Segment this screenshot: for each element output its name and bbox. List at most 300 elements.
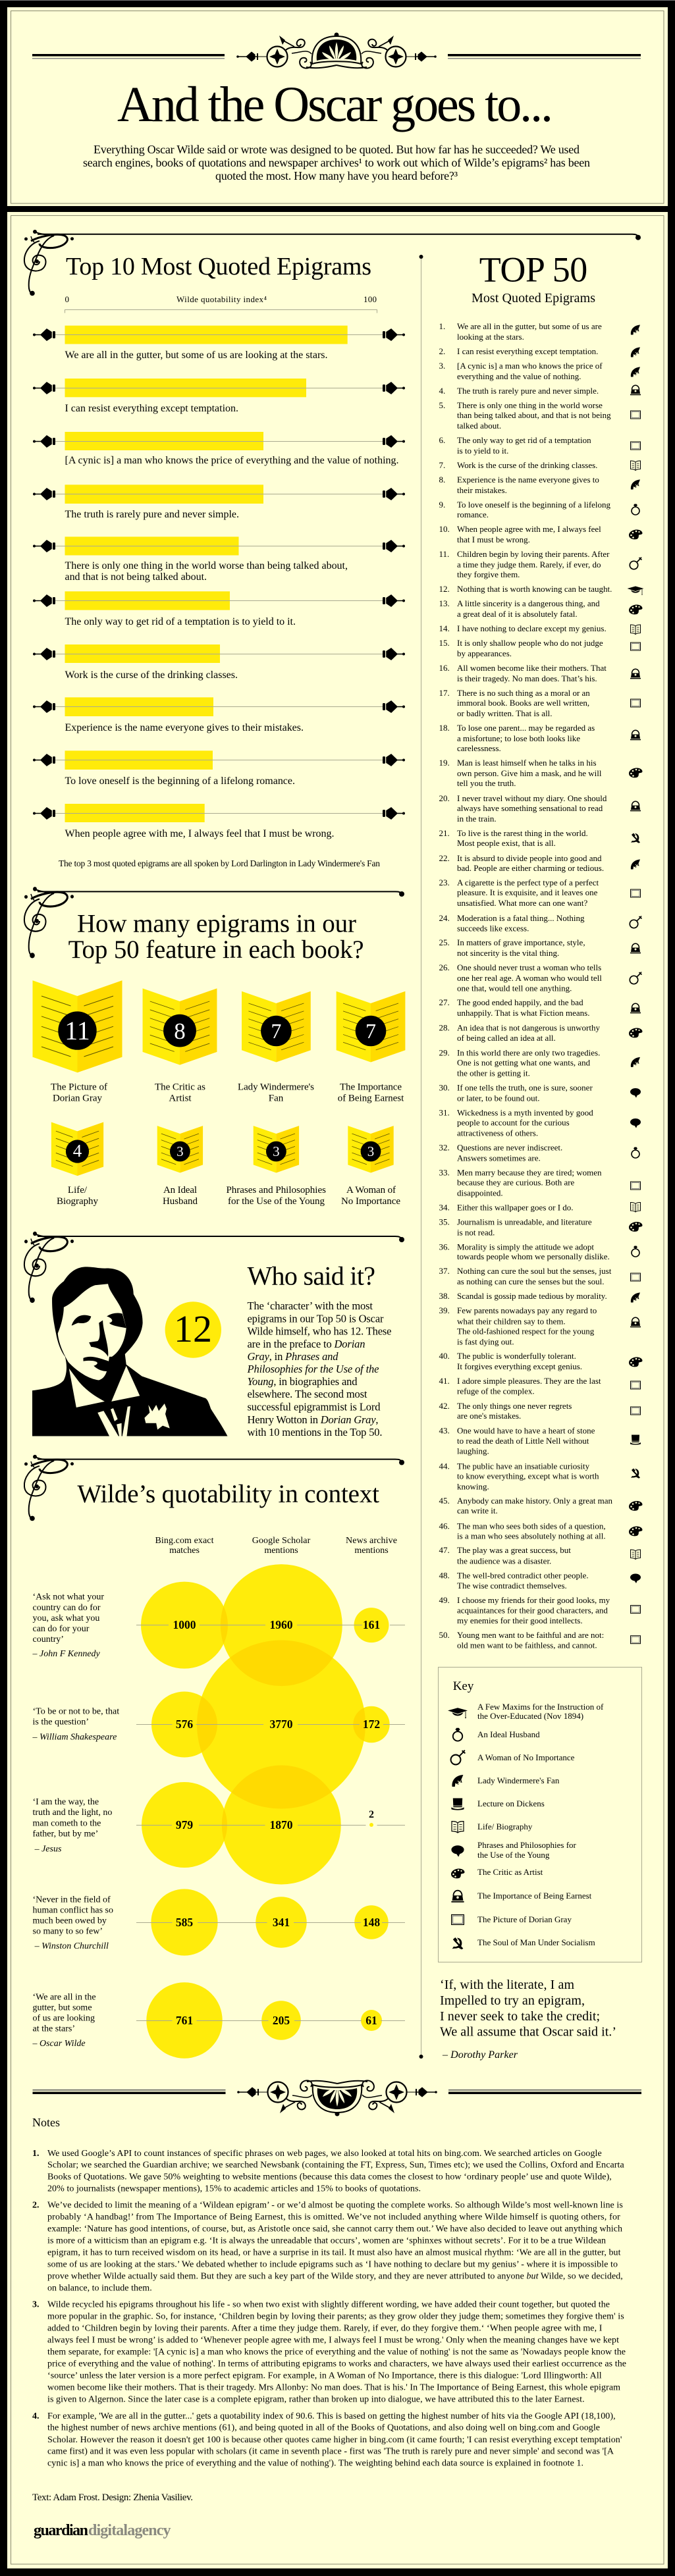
item 6 [439,435,640,456]
item 9: romance. [457,510,489,519]
item 16: 16. [439,663,450,673]
item 46: The man who sees both sides of a question, [457,1521,606,1531]
book: Life/Biography: Biography [57,1196,99,1207]
item 22: 22. [439,853,450,863]
item 20: I never travel without my diary. One should [457,793,607,803]
item 11: 11. [439,549,449,559]
key row: phrases [451,1840,577,1860]
item 22 [439,853,640,873]
item 28: of being called an idea at all. [457,1033,556,1043]
item 2: 2. [439,346,445,356]
book: Phrases and Philosophies: Phrases and Philosophies [226,1185,326,1196]
intro text: quoted the most. How many have you heard before?³ [215,169,458,182]
item 32: Questions are never indiscreet. [457,1143,562,1153]
column headers: mentions [264,1546,298,1556]
quote: Dorothy Parker: I never seek to take the credit; [440,2009,600,2024]
key row: maxims: the Over-Educated (Nov 1894) [477,1711,583,1721]
item 19: own person. Give him a mask, and he will [457,768,602,778]
row: Kennedy: 161 [363,1618,380,1631]
item 8: Experience is the name everyone gives to [457,475,599,485]
text block: who said it: successful epigrammist is Lord [248,1401,381,1413]
text block: who said it: are in the preface to Dorian [248,1338,365,1350]
item 44: knowing. [457,1481,489,1492]
item 37 [439,1266,640,1286]
row: Shakespeare: 172 [363,1718,380,1731]
intro text: search engines, books of quotations and newspaper archives¹ to work out which of Wilde’s epigrams² has been [83,156,590,169]
item 4: The truth is rarely pure and never simple. [457,386,599,396]
book: Phrases and Philosophies: 3 [273,1143,280,1159]
note 4: cynic is] a man who knows the price of everything and the value of nothing'). The weighting behind each data source is explained in footnote 1. [47,2459,583,2469]
item 33: Men marry because they are tired; women [457,1168,602,1177]
note 4: Scholar. However the reason it doesn't get 100 is because other quotes came higher in bing.com (it came fourth; 'I can resist everything except temptation' [47,2435,622,2445]
heading: books: Top 50 feature in each book? [68,935,364,964]
book: Lady Windermere's Fan [238,991,314,1103]
bar row 8 [33,697,405,733]
bar row 10: When people agree with me, I always feel that I must be wrong. [65,828,335,839]
note 1: 1. [32,2149,40,2159]
row: Churchill [33,1895,405,1951]
quote: Dorothy Parker: Impelled to try an epigram, [440,1993,585,2008]
book: A Woman of No Importance: A Woman of [346,1185,396,1196]
item 34: Either this wallpaper goes or I do. [457,1203,574,1213]
note 4: For example, 'We are all in the gutter...' gets a quotability index of 90.6. This is based on getting the highest number of hits via the Google API (18,100), [47,2411,616,2421]
item 44: to know everything, except what is worth [457,1471,599,1481]
bubbles [141,1564,390,2059]
item 42: 42. [439,1401,450,1411]
item 32: 32. [439,1143,450,1153]
row: Jesus: man cometh to the [33,1818,101,1829]
bar row 10 [33,804,405,839]
item 31: people to account for the curious [457,1118,570,1128]
row: Shakespeare: 3770 [270,1718,293,1731]
note 1: Scholar; we searched the Guardian archive; we searched Newsbank (containing the FT, Express, Sun, Times etc); we used the Collins, Oxford and Encarta [47,2161,624,2170]
key row: maxims [448,1702,604,1721]
book: Lady Windermere's Fan: Fan [269,1093,284,1103]
item 26: one that, would tell one anything. [457,984,572,993]
item 6: The only way to get rid of a temptation [457,435,591,445]
note 2: probably ‘A handbag!’ from The Importance of Being Earnest, this is omitted. We’ve not included anything where Wilde himself is quoting others, for [47,2212,620,2222]
column divider: top 50 [419,255,423,2059]
item 33: because they are curious. Both are [457,1178,575,1188]
key row: critic: The Critic as Artist [477,1867,543,1877]
chart: top 10 bars [33,294,405,839]
heading: notes: Notes [32,2116,60,2129]
item 16 [439,663,641,683]
note 3: always feel I must be wrong’ is added to ‘Whenever people agree with me, I always feel I must be wrong.' Only when the meaning changes have we kept [47,2336,619,2345]
column headers: mentions [354,1546,389,1556]
bar row 3 [33,432,405,466]
item 44: The public have an insatiable curiosity [457,1461,590,1471]
note 2: example: ‘Nature has good intentions, of course, but, as Aristotle once said, she cannot carry them out.’ We have also decided to leave out anything which [47,2224,622,2234]
row: Wilde: gutter, but some [33,2003,92,2013]
row: Kennedy: 1960 [270,1618,293,1631]
item 48: 48. [439,1571,450,1580]
item 44 [439,1461,640,1492]
text block: who said it: with 10 mentions in the Top 50. [248,1426,382,1438]
item 19 [439,758,643,788]
item 37: 37. [439,1266,450,1276]
item 11: they forgive them. [457,569,520,579]
bar row 5: There is only one thing in the world worse than being talked about, [65,560,348,571]
item 15 [439,638,640,658]
quote: Dorothy Parker [440,1978,616,2061]
item 27 [439,997,641,1018]
item 35: Journalism is unreadable, and literature [457,1217,592,1227]
item 38 [439,1291,640,1302]
item 30: or later, to be found out. [457,1093,539,1103]
item 17: 17. [439,688,450,698]
row: Churchill: 341 [273,1916,290,1929]
item 39 [439,1305,641,1347]
item 39: what their children say to them. [457,1316,566,1326]
row: Kennedy: can do for your [33,1624,90,1634]
bar row 5: and that is not being talked about. [65,571,207,583]
callout: number 12: 12 [174,1307,212,1350]
row: Churchill: 585 [176,1916,193,1929]
item 34 [439,1202,640,1213]
subheading: most quoted: Most Quoted Epigrams [472,291,595,305]
item 21: Most people exist, that is all. [457,838,556,848]
row: Jesus [33,1797,405,1854]
row: Churchill: 148 [363,1916,380,1929]
item 29: 29. [439,1048,450,1057]
panel: key [439,1667,641,1962]
text block: who said it: Henry Wotton in Dorian Gray, [248,1413,378,1426]
item 47: the audience was a disaster. [457,1556,551,1565]
item 40: The public is wonderfully tolerant. [457,1351,576,1361]
item 36: towards people whom we personally dislike. [457,1251,610,1261]
item 45: 45. [439,1496,450,1506]
item 38: Scandal is gossip made tedious by morality. [457,1291,607,1301]
item 24 [439,913,641,933]
item 7 [439,460,640,470]
item 17: or badly written. That is all. [457,708,553,718]
item 35: is not read. [457,1228,495,1238]
item 33: disappointed. [457,1188,503,1198]
text block: who said it: elsewhere. The second most [248,1388,367,1400]
book: A Woman of No Importance [341,1126,400,1207]
item 4 [439,385,641,396]
bar row 2: I can resist everything except temptation. [65,403,238,414]
item 30 [439,1082,641,1103]
key row: dickens: Lecture on Dickens [477,1799,545,1808]
heading: quotability: Wilde’s quotability in context [77,1480,379,1508]
notes [32,2149,626,2469]
bar row 1: We are all in the gutter, but some of us are looking at the stars. [65,350,328,361]
item 20: always have something sensational to read [457,803,603,813]
key row: dickens [451,1799,545,1810]
note 2: prove whether Wilde actually said them. But they are such a key part of the Wilde story, and they are never attributed to anyone but Wilde, so we decided, [47,2271,623,2281]
item 18: To lose one parent... may be regarded as [457,723,595,733]
quote: Dorothy Parker: ‘If, with the literate, I am [440,1978,574,1992]
book: Dorian Gray [33,980,122,1103]
chart: epigrams per book [33,980,405,1207]
item 23 [439,878,640,908]
bar row 7 [33,644,405,681]
row: Churchill: – Winston Churchill [34,1941,109,1951]
bar row 7: Work is the curse of the drinking classes. [65,670,238,681]
item 31 [439,1107,641,1138]
row: Kennedy: ‘Ask not what your [33,1592,104,1602]
item 47 [439,1545,640,1565]
row: Kennedy [32,1592,405,1659]
item 32: Answers sometimes are. [457,1153,541,1163]
item 26: 26. [439,962,450,972]
item 15: 15. [439,638,450,648]
book: A Woman of No Importance: 3 [367,1143,374,1159]
note 2: is more of a witticism than an epigram e.g. ‘It is always the unreadable that occurs’, women are ‘sphinxes without secrets’. For it to be a true Wildean [47,2236,606,2246]
item 4: 4. [439,386,445,396]
note 3: more popular in the graphic. So, for instance, ‘Children begin by loving their parents; as they grow older they judge them; sometimes they forgive them' is [47,2312,624,2322]
book: Lady Windermere's Fan: 7 [271,1019,281,1043]
item 41: refuge of the complex. [457,1386,535,1396]
item 10 [439,524,643,544]
bar row 4: The truth is rarely pure and never simple. [65,509,239,520]
book: Dorian Gray: 11 [65,1016,90,1045]
key row: woman of no importance: A Woman of No Importance [477,1752,575,1762]
book: Phrases and Philosophies: for the Use of the Young [228,1196,325,1207]
row: Wilde: of us are looking [33,2014,95,2024]
item 22: bad. People are either charming or tedious. [457,863,604,873]
item 15: by appearances. [457,648,512,658]
heading: TOP 50: TOP 50 [479,250,587,289]
row: Jesus: 979 [176,1818,193,1831]
note 3: is given to Algernon. Since the later case is a complete epigram, rather than broken up into dialogue, we have attributed this to the later Earnest. [47,2395,585,2405]
key row: biography [452,1822,533,1833]
item 18 [439,723,641,753]
item 30: If one tells the truth, one is sure, sooner [457,1082,593,1093]
item 17: immoral book. Books are well written, [457,698,589,708]
item 32 [439,1143,639,1163]
item 36: 36. [439,1242,450,1252]
row: Jesus: father, but by me’ [33,1829,98,1839]
item 22: It is absurd to divide people into good and [457,853,602,863]
item 40: 40. [439,1351,450,1361]
note 2: epigram, it has to turn received wisdom on its head, or have a surprise in its tail. It must also have an almost musical rhythm: ‘We are all in the gutter, but [47,2247,621,2258]
item 46 [439,1521,643,1540]
key row: socialism: The Soul of Man Under Socialism [477,1937,595,1947]
text block: who said it: Young, in biographies and [248,1375,358,1388]
note 4 [32,2411,622,2469]
note 2: some of us are looking at the stars.’ We debated whether to include epigrams such as ‘I have nothing to declare but my genius’ - where it is impossible to [47,2260,618,2270]
item 7: 7. [439,460,445,470]
key row: woman of no importance [451,1750,575,1764]
item 28 [439,1023,643,1043]
book: Importance of Being Earnest: of Being Earnest [338,1093,404,1103]
key row: windermere [452,1775,560,1787]
item 49: acquaintances for their good characters, and [457,1605,608,1615]
item 35 [439,1217,643,1238]
note 3: ‘source’ unless the later version is a more perfect epigram. For example, in A Woman of No Importance, there is this dialogue: 'Lord Illingworth: All [47,2371,602,2381]
row: Shakespeare: is the question’ [33,1717,89,1727]
item 49: I choose my friends for their good looks, my [457,1595,610,1605]
item 34: 34. [439,1203,450,1213]
heading: books: How many epigrams in our [77,910,356,937]
book: Critic as Artist [143,988,217,1103]
item 27: The good ended happily, and the bad [457,997,583,1007]
intro text [83,143,590,182]
item 15: It is only shallow people who do not judge [457,638,603,648]
bar row 8: Experience is the name everyone gives to their mistakes. [65,722,304,733]
row: Wilde: 61 [365,2014,377,2027]
note 4: came first) and it was even less popular with scholars (it came in seventh place - first was 'The truth is rarely pure and never simple' and second was '[A [47,2446,614,2457]
item 39: is fast dying out. [457,1336,514,1347]
key row: earnest: The Importance of Being Earnest [477,1891,592,1901]
note 3: Wilde recycled his epigrams throughout his life - so when two exist with slightly different wording, we have added their count together, but quoted the [47,2300,610,2309]
item 42: The only things one never regrets [457,1401,572,1411]
item 24: 24. [439,913,450,923]
illustration: Oscar Wilde portrait [32,1267,227,1436]
item 9: To love oneself is the beginning of a lifelong [457,500,611,510]
item 41: I adore simple pleasures. They are the last [457,1376,601,1386]
item 6: 6. [439,435,445,445]
row: Churchill: ‘Never in the field of [33,1895,111,1905]
bar row 9 [33,750,405,787]
row: Shakespeare [32,1706,405,1742]
item 45: can write it. [457,1506,498,1515]
book: Life/Biography: 4 [73,1141,82,1161]
item 23: pleasure. It is exquisite, and it leaves one [457,887,598,897]
logo: guardian digital agency: digitalagency [88,2522,171,2539]
item 10: that I must be wrong. [457,535,530,544]
key row: maxims: A Few Maxims for the Instruction of [477,1702,604,1712]
column headers: News archive [346,1536,397,1546]
book: An Ideal Husband: Husband [163,1196,198,1207]
chart: quotability bubbles [32,1536,405,2059]
note 2: We’ve decided to limit the meaning of a ‘Wildean epigram’ - or we’d almost be quoting the complete works. So although Wilde’s most well-known line is [47,2201,623,2211]
row: Wilde: 761 [176,2014,193,2027]
book: Phrases and Philosophies [226,1126,326,1207]
text block: who said it [246,1300,391,1438]
item 29: One is not getting what one wants, and [457,1058,591,1068]
item 21 [439,828,640,848]
item 40: It forgives everything except genius. [457,1361,582,1371]
item 10: 10. [439,524,450,534]
item 1: 1. [439,321,445,331]
heading: books [68,910,364,964]
note 3: 3. [32,2300,40,2309]
row: Jesus: – Jesus [34,1845,62,1854]
item 44: 44. [439,1461,450,1471]
item 24: Moderation is a fatal thing... Nothing [457,913,585,923]
key row: windermere: Lady Windermere's Fan [477,1775,560,1785]
note 1: Books of Quotations. We gave 50% weighting to website mentions (because this data comes the closest to how ‘ordinary people’ use and quote Wilde), [47,2172,612,2182]
item 23: unsatisfied. What more can one want? [457,898,588,908]
item 46: is a man who sees absolutely nothing at all. [457,1531,606,1540]
item 1: looking at the stars. [457,332,524,342]
key row: critic [451,1867,543,1878]
item 43: 43. [439,1426,450,1435]
item 19: Man is least himself when he talks in his [457,758,597,768]
note 2 [32,2201,623,2294]
book: Dorian Gray: The Picture of [51,1082,107,1093]
row: Kennedy: country can do for [33,1603,101,1613]
bar row 6: The only way to get rid of a temptation is to yield to it. [65,616,296,627]
book: Critic as Artist: Artist [169,1093,192,1103]
item 36 [439,1242,639,1261]
item 26 [439,962,641,993]
item 10: When people agree with me, I always feel [457,524,601,534]
item 6: is to yield to it. [457,446,508,456]
item 13: A little sincerity is a dangerous thing, and [457,598,600,608]
book: Lady Windermere's Fan: Lady Windermere's [238,1082,314,1093]
item 19: 19. [439,758,450,768]
row: Jesus: truth and the light, no [33,1808,112,1818]
item 30: 30. [439,1082,450,1093]
column headers: Bing.com exact [155,1536,214,1546]
credits: Text: Adam Frost. Design: Zhenia Vasiliev. [32,2492,193,2503]
item 27: 27. [439,997,450,1007]
item 48 [439,1571,641,1590]
axis: Wilde quotability index⁴ [176,294,267,304]
item 3: 3. [439,361,445,371]
item 47: 47. [439,1545,450,1555]
item 8: 8. [439,475,445,485]
item 33 [439,1168,640,1198]
note 3: women become like their mothers. That is their tragedy. Mrs Allonby: No man does. That is his.' In The Importance of Being Earnest, this whole epigram [47,2382,620,2392]
column headers: matches [169,1546,200,1556]
item 45: Anybody can make history. Only a great man [457,1496,612,1506]
key row: biography: Life/ Biography [477,1822,533,1831]
title: And the Oscar goes to... [117,77,553,132]
item 29: the other is getting it. [457,1068,530,1078]
item 29 [439,1048,640,1078]
key row: ideal husband [453,1728,540,1741]
item 11 [439,549,641,579]
item 23: A cigarette is the perfect type of a perfect [457,878,599,887]
note 2: 2. [32,2201,40,2211]
item 48: The well-bred contradict other people. [457,1571,589,1580]
text block: who said it: Philosophies for the Use of the [246,1363,379,1375]
item 5: than being talked about, and that is not being [457,410,611,420]
footer ornament [33,2080,641,2116]
item 43: laughing. [457,1446,489,1456]
note 3: them separate, for example: '[A cynic is] a man who knows the price of everything and the value of nothing' is not the same as 'Nowadays people know the [47,2348,626,2357]
list: top 50 epigrams [439,321,644,1650]
item 50 [439,1630,640,1650]
note 4: 4. [32,2411,40,2421]
key row: dorian gray: The Picture of Dorian Gray [477,1914,572,1924]
bar row 9: To love oneself is the beginning of a lifelong romance. [65,775,295,787]
bar row 3: [A cynic is] a man who knows the price of everything and the value of nothing. [65,455,399,466]
item 42 [439,1401,640,1421]
item 20: in the train. [457,814,497,824]
item 41 [439,1376,640,1396]
quote: Dorothy Parker: We all assume that Oscar said it.’ [440,2025,616,2039]
item 2: I can resist everything except temptation. [457,346,598,356]
item 16: is their tragedy. No man does. That’s his. [457,673,597,683]
book: An Ideal Husband: An Ideal [163,1185,197,1196]
item 49: my enemies for their good intellects. [457,1616,583,1625]
item 37: as nothing can cure the senses but the soul. [457,1276,604,1286]
book: Life/Biography: Life/ [68,1185,88,1196]
section flourish: books [24,887,404,958]
book: Life/Biography [51,1122,103,1207]
note 3: price of everything and the value of nothing'. In terms of attributing epigrams to works and characters, we have always used their earliest occurrence as the [47,2359,626,2369]
item 19: tell you the truth. [457,778,516,788]
item 31: Wickedness is a myth invented by good [457,1107,593,1118]
note 3: added to ‘Children begin by loving their parents. After a time they judge them. Rarely, if ever, do they forgive them.‘ ‘When people agree with me, I [47,2323,603,2333]
item 31: attractiveness of others. [457,1128,538,1138]
item 8 [439,475,640,495]
item 3: [A cynic is] a man who knows the price of [457,361,603,371]
intro text: Everything Oscar Wilde said or wrote was designed to be quoted. But how far has he succeeded? We used [94,143,580,156]
item 39: The old-fashioned respect for the young [457,1326,595,1336]
quote: Dorothy Parker: – Dorothy Parker [442,2049,518,2061]
item 33: 33. [439,1168,450,1177]
item 24: succeeds like excess. [457,923,529,933]
item 7: Work is the curse of the drinking classes. [457,460,597,470]
